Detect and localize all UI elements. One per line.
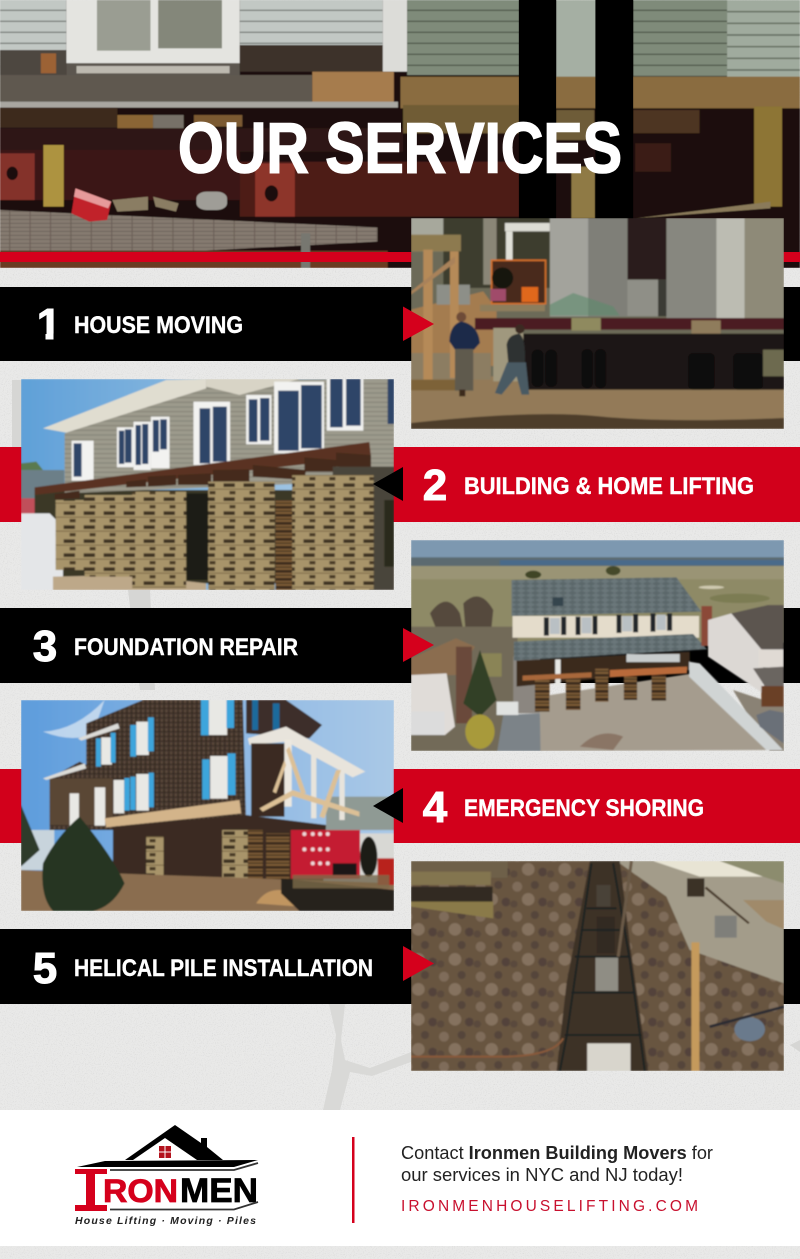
footer divider <box>352 1137 354 1223</box>
band 4 <box>0 769 800 843</box>
number 2: 2 <box>423 461 447 510</box>
band 5 <box>0 929 800 1004</box>
band 2 <box>0 447 800 522</box>
number 1: 1 <box>37 300 61 349</box>
worker right <box>495 324 529 395</box>
band 3 <box>0 608 800 683</box>
logo: Ironmen <box>75 1125 258 1227</box>
photo: building lifted on cribbing <box>21 379 394 590</box>
arrow 2 <box>373 467 403 501</box>
red rule under header <box>0 252 800 262</box>
footer contact text: Contact Ironmen Building Movers for <box>401 1143 713 1163</box>
vertical black stripes <box>519 0 633 220</box>
logo: Ironmen: MEN <box>180 1172 258 1210</box>
arrow 1 <box>403 306 434 341</box>
title: OUR SERVICES <box>178 110 622 188</box>
header photo: lifted house on steel beams <box>0 0 800 268</box>
photo: shingled house with shoring <box>21 700 394 911</box>
website: IRONMENHOUSELIFTING.COM <box>401 1198 698 1215</box>
footer panel <box>0 1110 800 1246</box>
worker left <box>449 312 480 396</box>
photo: trench with helical piles <box>411 861 784 1071</box>
label: helical pile installation: HELICAL PILE INSTALLATION <box>74 955 373 982</box>
label: emergency shoring: EMERGENCY SHORING <box>464 795 704 822</box>
arrow 5 <box>403 946 434 981</box>
footer contact text <box>401 1143 713 1215</box>
arrow 3 <box>403 628 434 662</box>
footer contact text: our services in NYC and NJ today! <box>401 1165 683 1185</box>
logo tagline: House Lifting · Moving · Piles <box>75 1215 256 1227</box>
logo I <box>75 1169 107 1211</box>
photo: aerial of lifted house <box>411 540 784 751</box>
number 5: 5 <box>33 944 57 993</box>
arrow 4 <box>373 788 403 823</box>
label: foundation repair: FOUNDATION REPAIR <box>74 634 298 661</box>
number 4: 4 <box>423 783 448 832</box>
label: house moving: HOUSE MOVING <box>74 312 243 339</box>
logo roof <box>125 1125 223 1160</box>
label: building and home lifting: BUILDING & HOME LIFTING <box>464 473 754 500</box>
band 1 <box>0 287 800 361</box>
photo: house moving on trailer <box>411 218 784 429</box>
logo wordmark: RON <box>103 1173 178 1209</box>
number 3: 3 <box>33 622 57 671</box>
